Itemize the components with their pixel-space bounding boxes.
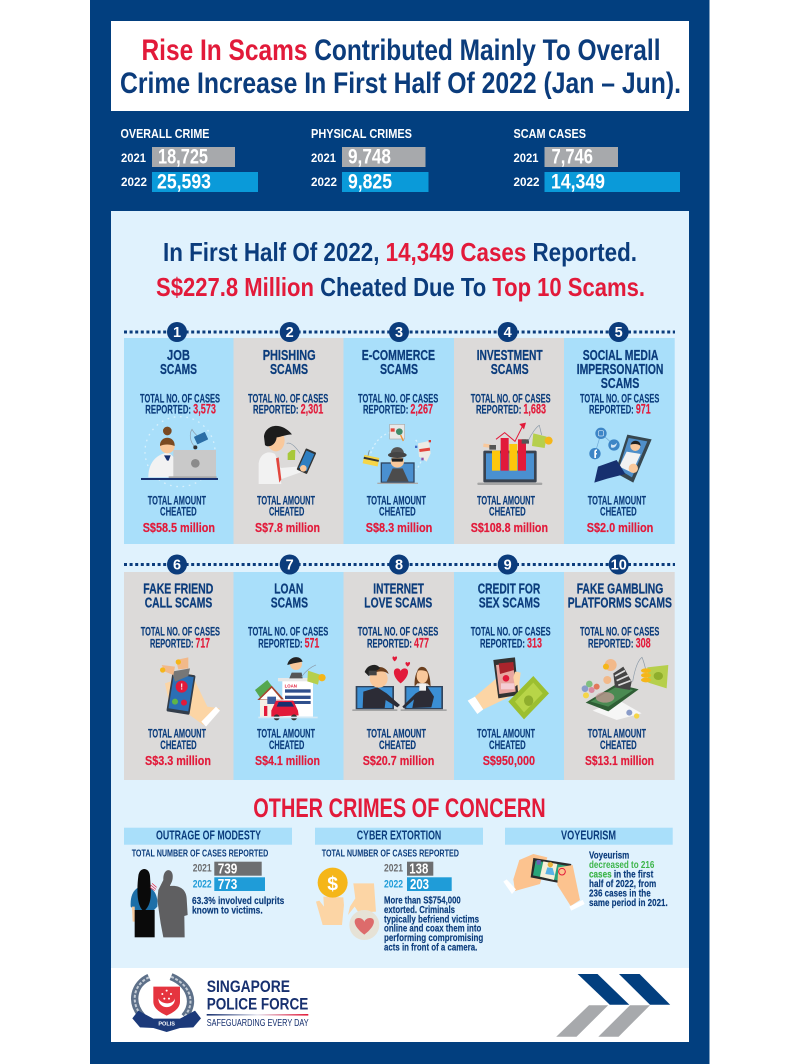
cyber bar chart: 2022 — [384, 879, 403, 891]
stat: scam cases: 2022 — [514, 175, 540, 189]
card 4 title — [477, 348, 543, 378]
card 2 amount: CHEATED — [269, 506, 304, 518]
card 4 amount: CHEATED — [489, 506, 526, 518]
police crest logo: POLIS — [158, 1021, 175, 1027]
other crimes heading: OTHER CRIMES OF CONCERN — [253, 793, 546, 823]
card 8 amount — [363, 728, 434, 768]
police wordmark — [207, 978, 309, 1029]
number badge 7: 7 — [286, 558, 294, 574]
card 6 amount — [145, 728, 211, 768]
card 1 amount — [143, 496, 215, 535]
icon: robber at roulette table with money — [582, 657, 668, 720]
title line 2: Crime Increase In First Half Of 2022 (Jan – Jun). — [120, 67, 681, 100]
card 10 amount: CHEATED — [600, 740, 637, 752]
number badge 5 — [609, 322, 629, 342]
card 2 title: SCAMS — [270, 362, 308, 378]
icon: masked hacker in laptop with card and shop items — [363, 424, 431, 484]
card 6 cases — [141, 626, 220, 650]
voyeurism note — [589, 850, 668, 909]
card 9 amount: TOTAL AMOUNT — [477, 728, 535, 740]
number badge 4 — [498, 322, 518, 342]
panel: cyber extortion: TOTAL NUMBER OF CASES REPORTED — [322, 848, 459, 860]
card 4 title: SCAMS — [491, 362, 529, 378]
card 5: social media impersonation scams — [564, 322, 675, 544]
card 8: internet love scams — [344, 554, 454, 780]
card 6 cases: REPORTED: 717 — [150, 636, 210, 650]
cyber bar chart: 138 — [409, 860, 428, 878]
panel: cyber extortion — [315, 828, 483, 954]
card 9 amount: S$950,000 — [483, 753, 535, 768]
card 1 amount: TOTAL AMOUNT — [148, 496, 206, 508]
card 10 amount: TOTAL AMOUNT — [588, 728, 646, 740]
card 2 amount — [255, 496, 320, 535]
card 1 cases: TOTAL NO. OF CASES — [140, 394, 220, 406]
card 10: fake gambling platforms scams — [564, 554, 675, 780]
card 10 cases: REPORTED: 308 — [588, 636, 651, 650]
card 9 cases: REPORTED: 313 — [480, 636, 542, 650]
stat: scam cases: 2021 — [514, 151, 539, 165]
card 10 title: PLATFORMS SCAMS — [568, 596, 672, 612]
cyber note: acts in front of a camera. — [384, 942, 477, 954]
card 6: fake friend call scams — [124, 554, 234, 780]
number badge 1 — [167, 322, 187, 342]
card 7 amount: TOTAL AMOUNT — [257, 728, 315, 740]
card 2 amount: S$7.8 million — [255, 520, 320, 535]
card 7 amount — [255, 728, 320, 768]
police wordmark: POLICE FORCE — [207, 995, 308, 1013]
stat: physical crimes: 2021 — [311, 151, 336, 165]
panel: outrage of modesty — [124, 828, 292, 937]
number badge 1: 1 — [173, 325, 181, 341]
cyber note: online and coax them into — [384, 923, 481, 935]
icon: man with tablet and hooked money — [259, 426, 316, 484]
panel: cyber extortion: CYBER EXTORTION — [357, 828, 441, 842]
panel: outrage of modesty: OUTRAGE OF MODESTY — [156, 828, 261, 842]
navy page background — [90, 0, 710, 1064]
card 2 title — [263, 348, 316, 378]
card 3 cases: TOTAL NO. OF CASES — [358, 394, 439, 406]
card 7 cases: TOTAL NO. OF CASES — [248, 626, 329, 638]
card 1 title: SCAMS — [160, 362, 197, 378]
number badge 2: 2 — [286, 325, 294, 341]
icon: coin and heart in hands: $ — [327, 874, 338, 895]
card 5 title: IMPERSONATION — [577, 362, 663, 378]
card 9: credit for sex scams — [454, 554, 564, 780]
voyeurism note: same period in 2021. — [589, 897, 668, 909]
card 4 cases: TOTAL NO. OF CASES — [471, 394, 551, 406]
stat: overall crime: 2021 — [121, 151, 146, 165]
stat: physical crimes: 9,748 — [348, 146, 391, 168]
icon: couple on laptops with hearts — [352, 656, 447, 711]
card 5 title — [577, 348, 663, 392]
card 3 title: E-COMMERCE — [362, 348, 435, 364]
icon: loan document, house, car, robber: LOAN — [285, 683, 297, 688]
card 9 amount — [477, 728, 535, 768]
cyber bar chart — [384, 860, 452, 893]
stat: overall crime — [120, 126, 258, 194]
outrage bar chart — [193, 860, 265, 893]
panel: voyeurism — [503, 828, 673, 911]
card 5 cases: REPORTED: 971 — [589, 402, 651, 416]
card 6 amount: TOTAL AMOUNT — [148, 728, 206, 740]
number badge 6: 6 — [173, 558, 181, 574]
card 8 amount: S$20.7 million — [363, 753, 434, 768]
card 8 amount: CHEATED — [379, 740, 416, 752]
card 7 amount: S$4.1 million — [255, 753, 320, 768]
card 9 amount: CHEATED — [489, 740, 526, 752]
light blue main panel — [111, 211, 689, 968]
card 2 cases — [248, 394, 329, 416]
voyeurism note: decreased to 216 — [589, 859, 654, 871]
card 1 amount: CHEATED — [160, 506, 197, 518]
stat: overall crime: OVERALL CRIME — [120, 126, 210, 141]
cyber bar chart: 203 — [410, 876, 429, 893]
card 10 cases: TOTAL NO. OF CASES — [580, 626, 660, 638]
outrage bar chart: 739 — [218, 860, 237, 878]
outrage bar chart: 2021 — [193, 863, 212, 875]
panel: outrage of modesty: TOTAL NUMBER OF CASES REPORTED — [132, 848, 269, 860]
cyber note — [384, 895, 483, 954]
card 2 cases: TOTAL NO. OF CASES — [248, 394, 329, 406]
card 7 amount: CHEATED — [269, 740, 304, 752]
number badge 2 — [280, 322, 300, 342]
card 8 title: INTERNET — [373, 581, 424, 597]
outrage bar chart: 773 — [218, 876, 237, 893]
card 7 cases — [248, 626, 329, 650]
icon: coin and heart in hands — [316, 868, 379, 940]
card 6 amount: S$3.3 million — [145, 753, 211, 768]
card 4 amount: S$108.8 million — [471, 520, 548, 535]
card 9 title — [478, 581, 541, 612]
number badge 3: 3 — [395, 325, 403, 341]
card 5 title: SCAMS — [601, 376, 640, 392]
card 6 cases: TOTAL NO. OF CASES — [141, 626, 220, 638]
card 4 title: INVESTMENT — [477, 348, 543, 364]
card 9 cases: TOTAL NO. OF CASES — [471, 626, 551, 638]
card 1 title — [160, 348, 197, 378]
card 5 amount: S$2.0 million — [587, 520, 653, 535]
card 4 amount: TOTAL AMOUNT — [477, 496, 535, 508]
outrage bar chart: 2022 — [193, 879, 212, 891]
icon: loan document, house, car, robber — [255, 657, 326, 720]
voyeurism note: 236 cases in the — [589, 888, 651, 900]
card 5 amount — [587, 496, 653, 535]
card 6 title: CALL SCAMS — [145, 596, 213, 612]
card 2: phishing scams — [234, 322, 344, 544]
card 3: e-commerce scams — [344, 322, 454, 544]
icon: phone with fake profile and social icons — [589, 428, 652, 483]
title line 1: Rise In Scams Contributed Mainly To Overall — [142, 34, 660, 67]
stat: physical crimes: PHYSICAL CRIMES — [311, 126, 412, 141]
card 3 amount: CHEATED — [379, 506, 416, 518]
number badge 9 — [498, 554, 518, 574]
card 3 cases — [358, 394, 439, 416]
cyber note: More than S$754,000 — [384, 895, 461, 907]
card 3 amount: TOTAL AMOUNT — [367, 496, 426, 508]
card 6 title: FAKE FRIEND — [143, 581, 213, 597]
card 4 cases — [471, 394, 551, 416]
footer white band — [111, 968, 689, 1042]
card 2 amount: TOTAL AMOUNT — [257, 496, 315, 508]
title box — [111, 21, 689, 111]
card 3 cases: REPORTED: 2,267 — [363, 402, 433, 416]
number badge 9: 9 — [504, 558, 512, 574]
card 4: investment scams — [454, 322, 564, 544]
police crest logo — [132, 977, 201, 1032]
card 10 amount: S$13.1 million — [585, 753, 654, 768]
icon: man touching woman silhouette — [131, 869, 188, 937]
card 4 cases: REPORTED: 1,683 — [476, 402, 546, 416]
card 8 cases: REPORTED: 477 — [367, 636, 429, 650]
main heading: S$227.8 Million Cheated Due To Top 10 Scams. — [156, 272, 645, 302]
card 6 title — [143, 581, 213, 612]
cyber note: typically befriend victims — [384, 914, 479, 926]
card 3 amount: S$8.3 million — [366, 520, 432, 535]
chevron arrows — [556, 974, 670, 1037]
icon: hand holding phone with alert — [160, 657, 220, 727]
number badge 8 — [389, 554, 409, 574]
card 7 title: LOAN — [274, 581, 303, 597]
card 1 cases — [140, 394, 220, 416]
card 3 title: SCAMS — [380, 362, 418, 378]
card 1 amount: S$58.5 million — [143, 520, 215, 535]
card 10 title — [568, 581, 672, 612]
card 10 title: FAKE GAMBLING — [577, 581, 663, 597]
icon: hand with phone and banknotes — [468, 657, 549, 719]
card 9 title: SEX SCAMS — [479, 596, 540, 612]
stat: scam cases: SCAM CASES — [514, 126, 586, 141]
card 7 title — [271, 581, 308, 612]
card 1 cases: REPORTED: 3,573 — [145, 402, 216, 416]
outrage note — [192, 895, 284, 917]
number badge 10: 10 — [611, 558, 627, 574]
card 9 title: CREDIT FOR — [478, 581, 541, 597]
card 4 amount — [471, 496, 548, 535]
stat: physical crimes — [311, 126, 428, 194]
cyber note: performing compromising — [384, 932, 483, 944]
number badge 4: 4 — [504, 325, 512, 341]
icon: hand holding phone with alert: ! — [180, 682, 183, 691]
voyeurism note: cases in the first — [589, 869, 654, 881]
card 9 cases — [471, 626, 551, 650]
icon: rising bar chart on laptop with hooked money — [477, 423, 553, 485]
stat: overall crime: 25,593 — [157, 170, 211, 194]
main heading — [156, 237, 645, 302]
number badge 3 — [389, 322, 409, 342]
number badge 5: 5 — [615, 325, 623, 341]
card 5 title: SOCIAL MEDIA — [583, 348, 659, 364]
icon: hands holding smartphone — [503, 854, 585, 911]
cyber bar chart: 2021 — [384, 863, 403, 875]
stat: scam cases — [514, 126, 680, 194]
voyeurism note: Voyeurism — [589, 850, 629, 862]
number badge 7 — [280, 554, 300, 574]
outrage note: known to victims. — [192, 905, 263, 917]
card 5 amount: TOTAL AMOUNT — [588, 496, 646, 508]
stat: overall crime: 2022 — [121, 175, 147, 189]
panel: voyeurism: VOYEURISM — [561, 828, 616, 842]
card 8 title — [364, 581, 433, 612]
outrage note: 63.3% involved culprits — [192, 895, 284, 907]
stat: scam cases: 14,349 — [551, 170, 605, 194]
police wordmark: SAFEGUARDING EVERY DAY — [207, 1018, 309, 1029]
card 5 cases: TOTAL NO. OF CASES — [580, 394, 660, 406]
card 8 title: LOVE SCAMS — [364, 596, 433, 612]
card 10 amount — [585, 728, 654, 768]
stat: scam cases: 7,746 — [552, 146, 593, 168]
police wordmark: SINGAPORE — [207, 978, 290, 996]
card 2 title: PHISHING — [263, 348, 316, 364]
card 1 title: JOB — [167, 348, 190, 364]
icon: woman at laptop with hooked briefcase — [141, 417, 218, 487]
card 1: job scams — [124, 322, 234, 544]
card 8 cases: TOTAL NO. OF CASES — [358, 626, 439, 638]
card 3 title — [362, 348, 435, 378]
card 7 title: SCAMS — [271, 596, 308, 612]
card 6 amount: CHEATED — [160, 740, 197, 752]
number badge 6 — [167, 554, 187, 574]
card 10 cases — [580, 626, 660, 650]
stat: physical crimes: 9,825 — [348, 170, 392, 194]
stat: physical crimes: 2022 — [311, 175, 337, 189]
voyeurism note: half of 2022, from — [589, 878, 656, 890]
number badge 10 — [609, 554, 629, 574]
card 5 cases — [580, 394, 660, 416]
cyber note: extorted. Criminals — [384, 904, 455, 916]
main heading: In First Half Of 2022, 14,349 Cases Reported. — [163, 237, 637, 267]
card 8 amount: TOTAL AMOUNT — [367, 728, 426, 740]
card 8 cases — [358, 626, 439, 650]
card 3 amount — [366, 496, 432, 535]
card 7 cases: REPORTED: 571 — [258, 636, 320, 650]
card 7: loan scams — [234, 554, 344, 780]
number badge 8: 8 — [395, 558, 403, 574]
card 2 cases: REPORTED: 2,301 — [253, 402, 324, 416]
card 5 amount: CHEATED — [600, 506, 637, 518]
stat: overall crime: 18,725 — [158, 146, 208, 168]
